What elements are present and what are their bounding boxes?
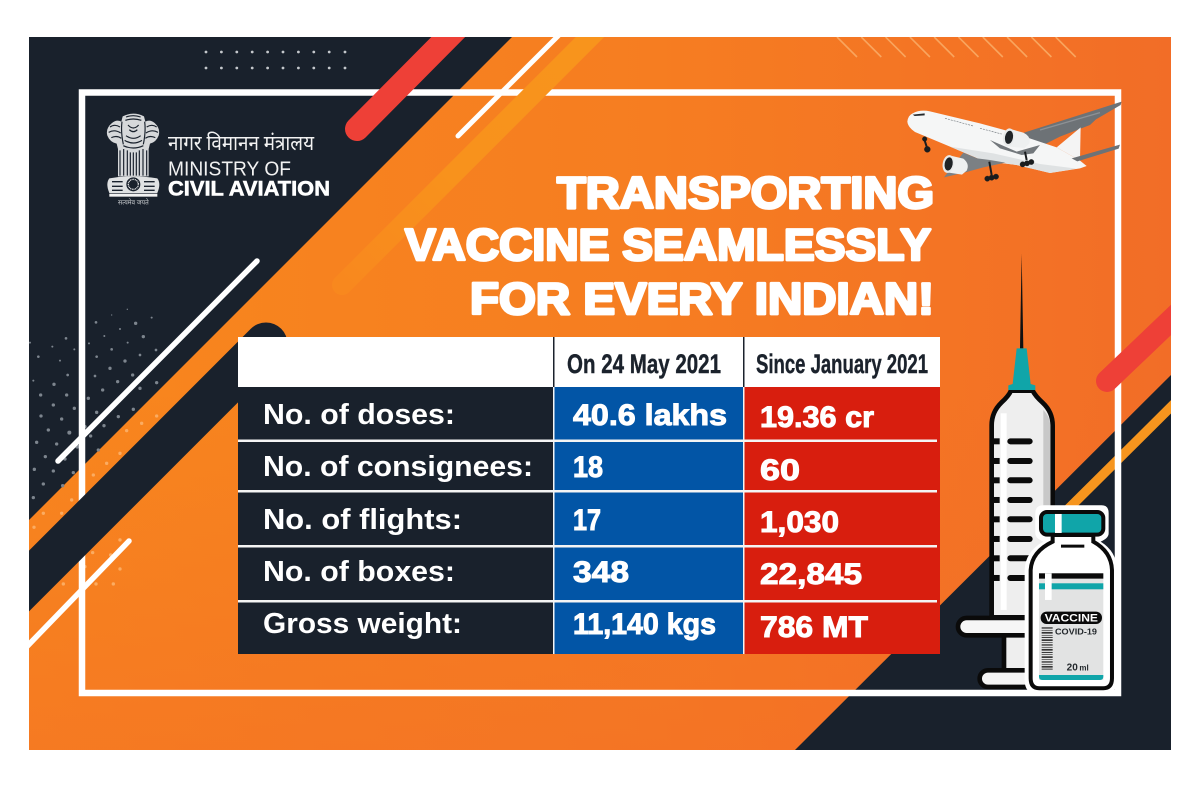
needle	[1020, 253, 1023, 348]
dark corner lower right	[795, 375, 1171, 750]
volume label: 20ml	[1067, 662, 1089, 673]
engine left	[949, 155, 968, 175]
fuselage	[907, 111, 1087, 173]
tail fin	[1057, 127, 1081, 161]
icon: syringe	[958, 253, 1053, 687]
table	[238, 337, 940, 654]
near wing	[944, 153, 1005, 177]
plunger	[1004, 633, 1036, 672]
table header	[238, 337, 940, 387]
dot grid top	[205, 51, 346, 69]
scale ticks	[992, 438, 1033, 581]
vial cap	[1041, 512, 1103, 535]
stabilizer	[1072, 145, 1120, 161]
dark diagonal band	[0, 344, 266, 610]
column: on 24 may 2021: 18	[573, 451, 603, 484]
emblem motto: सत्यमेव जयते	[118, 199, 149, 208]
icon: airplane	[907, 102, 1122, 181]
vial label	[1039, 573, 1103, 680]
white frame	[82, 92, 1118, 693]
landing gear	[922, 137, 1034, 181]
red pill right	[1096, 305, 1171, 392]
logo: ministry of civil aviation	[107, 114, 330, 208]
title: TRANSPORTING	[557, 169, 934, 218]
column: labels: No. of boxes:	[263, 556, 455, 588]
icon: vaccine vial	[1025, 505, 1117, 694]
pale stripe behind title	[356, 37, 604, 272]
table header: Since January 2021	[756, 349, 928, 379]
hub	[1008, 348, 1035, 390]
column: since january 2021	[744, 387, 940, 654]
barcode	[1042, 627, 1053, 670]
column: labels: No. of doses:	[263, 399, 455, 431]
title: FOR EVERY INDIAN!	[470, 275, 934, 324]
hindi ministry name: नागर विमानन मंत्रालय	[168, 131, 315, 159]
column: on 24 may 2021: 40.6 lakhs	[573, 399, 727, 432]
white line lower left	[29, 538, 132, 648]
column: since january 2021: 19.36 cr	[760, 401, 874, 434]
vial halo	[1025, 505, 1117, 694]
column: on 24 may 2021: 11,140 kgs	[573, 608, 716, 641]
yellow stripe right	[1065, 400, 1171, 506]
column: labels	[238, 387, 554, 654]
column: on 24 may 2021: 17	[573, 504, 601, 537]
title	[405, 169, 934, 324]
column: labels: No. of flights:	[263, 504, 462, 536]
engine right	[1009, 129, 1030, 148]
barrel	[992, 391, 1053, 617]
column: since january 2021: 786 MT	[760, 611, 868, 644]
dark corner upper left	[29, 37, 512, 520]
column: since january 2021: 60	[760, 454, 800, 487]
red pill top	[345, 37, 466, 141]
covid label: COVID-19	[1055, 627, 1098, 636]
column: since january 2021: 22,845	[760, 558, 862, 591]
ministry of: MINISTRY OF	[168, 158, 291, 180]
far wing	[1024, 102, 1122, 146]
hatch lines top right	[837, 37, 1076, 57]
column: labels: No. of consignees:	[263, 451, 533, 483]
halftone dots left	[29, 309, 158, 499]
vaccine tag	[1041, 612, 1102, 624]
icon: vaccine vial: VACCINE	[1045, 612, 1098, 624]
column: on 24 may 2021: 348	[573, 556, 629, 589]
halftone dots on orange	[32, 414, 158, 586]
icon: national emblem	[107, 114, 159, 208]
column: labels: Gross weight:	[263, 608, 462, 640]
column: since january 2021: 1,030	[760, 506, 839, 539]
white line upper left	[58, 261, 257, 461]
title: VACCINE SEAMLESSLY	[405, 221, 931, 270]
table row rules	[238, 387, 937, 654]
civil aviation: CIVIL AVIATION	[168, 176, 330, 200]
white line top	[458, 34, 560, 136]
vial body	[1031, 535, 1112, 688]
table header: On 24 May 2021	[567, 349, 721, 379]
column: on 24 may 2021	[554, 387, 743, 654]
